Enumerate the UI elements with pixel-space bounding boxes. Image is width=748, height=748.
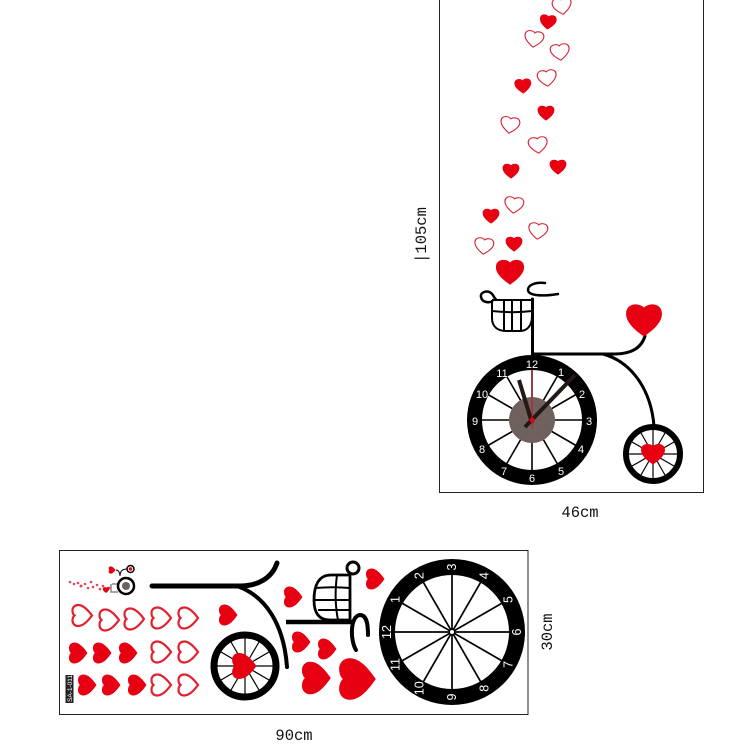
- rotated numerals: 2: [412, 572, 426, 579]
- rotated numerals: 10: [412, 681, 426, 695]
- clock numerals: [472, 359, 592, 485]
- unassembled frame pieces: [152, 563, 368, 667]
- spokes: [395, 575, 509, 689]
- rotated numerals: 11: [389, 658, 403, 671]
- clock numerals: 11: [496, 368, 508, 380]
- dimension label: height: 30cm: [539, 613, 557, 651]
- outline hearts grid: [72, 605, 198, 696]
- product code tag: SA-1-011W: [67, 668, 74, 702]
- dimension label: width: 90cm: [275, 727, 313, 745]
- clock numerals: 10: [476, 389, 488, 401]
- dimension label: width: 46cm: [561, 504, 599, 522]
- rotated numerals: 9: [445, 693, 459, 700]
- clock numerals: 8: [479, 444, 485, 456]
- clock wheel: [472, 359, 592, 485]
- rotated numerals: 8: [478, 685, 492, 692]
- panel: horizontal sticker sheet: [60, 550, 528, 714]
- trail of floating hearts: [474, 0, 573, 285]
- rotated numerals: 7: [501, 661, 515, 668]
- thumbnail of assembled sticker: [69, 566, 134, 594]
- small wheel piece: [214, 635, 276, 697]
- panel: vertical sticker sheet: [440, 0, 704, 492]
- large clock wheel piece: [380, 563, 524, 700]
- rotated numerals: 12: [380, 625, 394, 639]
- clock hub: [509, 397, 555, 443]
- dimension label: height: |105cm: [413, 207, 431, 263]
- clock numerals: 6: [529, 473, 535, 485]
- clock numerals: 2: [579, 389, 585, 401]
- clock numerals: 5: [558, 466, 564, 478]
- rotated numerals: [380, 563, 524, 700]
- rotated numerals: 5: [501, 596, 515, 603]
- rotated numerals: 3: [445, 563, 459, 570]
- rotated numerals: 4: [478, 572, 492, 579]
- bicycle frame: [528, 283, 654, 426]
- filled hearts grid: [69, 568, 384, 700]
- spokes: [481, 369, 583, 471]
- icon: basket: [481, 292, 533, 331]
- rotated numerals: 6: [510, 628, 524, 635]
- clock numerals: 9: [472, 416, 478, 428]
- clock numerals: 4: [578, 444, 584, 456]
- icon: basket piece: [314, 562, 359, 620]
- clock numerals: 3: [586, 416, 592, 428]
- clock numerals: 12: [526, 359, 538, 371]
- rotated numerals: 1: [389, 596, 403, 603]
- small rear wheel: [626, 427, 680, 481]
- clock numerals: 1: [558, 367, 564, 379]
- clock hands: [519, 370, 575, 428]
- icon: heart on handlebar: [626, 304, 662, 336]
- clock numerals: 7: [501, 466, 507, 478]
